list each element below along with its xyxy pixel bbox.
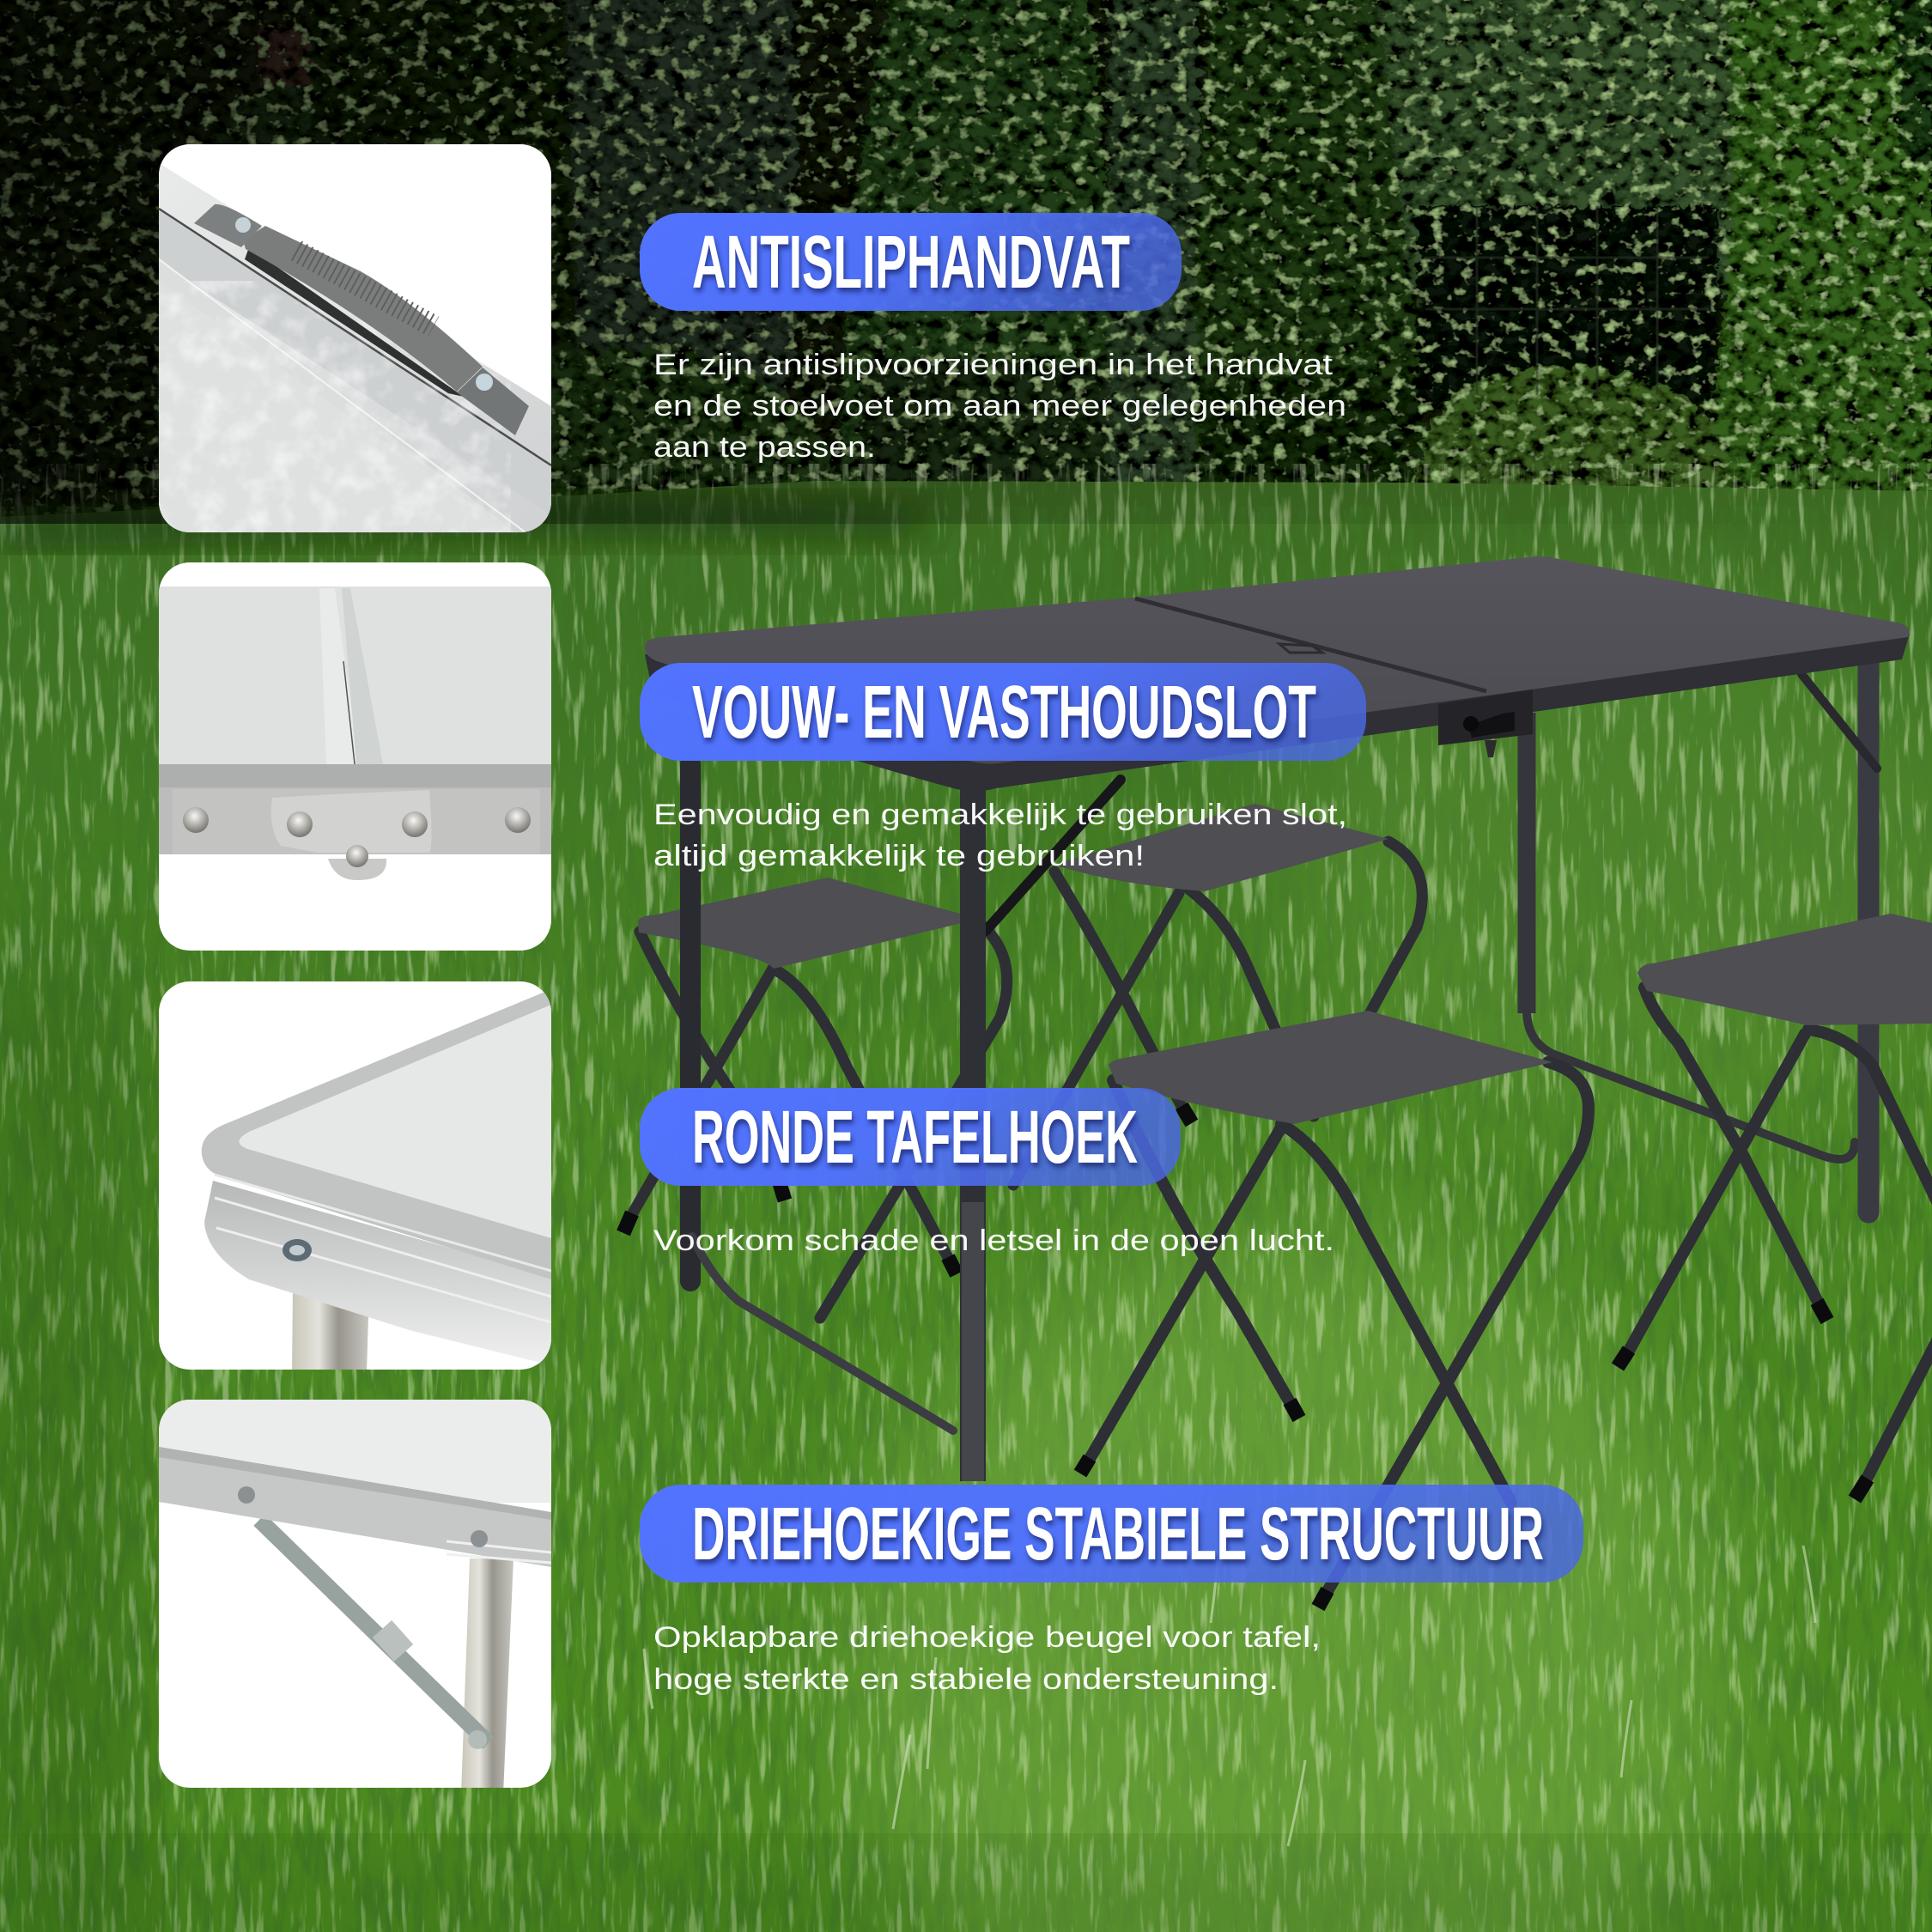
table: folding table with legs xyxy=(645,556,1910,1481)
folding lock xyxy=(1438,690,1533,757)
description: Voorkom schade en letsel in de open lucht. xyxy=(653,1224,1334,1257)
description: altijd gemakkelijk te gebruiken! xyxy=(653,840,1145,872)
heading pill xyxy=(640,663,1366,761)
trees and hedges xyxy=(0,0,1932,550)
heading pill: ANTISLIPHANDVAT xyxy=(692,221,1130,304)
table leg xyxy=(292,1293,368,1370)
centre brace xyxy=(986,780,1121,931)
front left leg xyxy=(960,777,986,1481)
lawn xyxy=(0,481,1932,1932)
callout: folding lock xyxy=(640,663,1366,872)
heading pill xyxy=(640,1485,1583,1583)
panel: anti-slip handle photo xyxy=(159,144,551,532)
description: Er zijn antislipvoorzieningen in het handvat xyxy=(653,349,1334,381)
description xyxy=(653,1621,1321,1696)
stool: front centre xyxy=(1080,1011,1589,1607)
callout: round table corner xyxy=(640,1088,1334,1257)
frame and panel xyxy=(202,989,551,1279)
side band xyxy=(204,1181,551,1365)
callout: antislip handle xyxy=(640,213,1346,464)
back left leg and foot bar xyxy=(690,764,953,1431)
stool: back centre xyxy=(1013,804,1422,1185)
panel: triangular bracket photo xyxy=(159,1400,551,1795)
right brace xyxy=(1801,674,1877,769)
description xyxy=(653,799,1347,872)
stool: front right xyxy=(1618,914,1932,1499)
dark photo overlay xyxy=(0,0,1932,524)
heading pill xyxy=(640,1088,1181,1186)
panel: round table corner photo xyxy=(159,981,551,1374)
table top xyxy=(645,556,1910,763)
description: hoge sterkte en stabiele ondersteuning. xyxy=(653,1663,1279,1696)
panel: folding lock photo xyxy=(159,562,551,951)
callout: triangular structure xyxy=(640,1485,1583,1696)
table side band xyxy=(645,634,1910,792)
right hinge leg and foot bar xyxy=(1527,713,1855,1159)
right leg xyxy=(1858,653,1879,1212)
description: Opklapbare driehoekige beugel voor tafel, xyxy=(653,1621,1321,1654)
heading pill: RONDE TAFELHOEK xyxy=(692,1096,1138,1179)
brace xyxy=(259,1520,489,1743)
lock plate and rivets xyxy=(183,790,531,880)
heading pill: VOUW- EN VASTHOUDSLOT xyxy=(692,671,1316,754)
description: en de stoelvoet om aan meer gelegenheden xyxy=(653,390,1346,422)
description: aan te passen. xyxy=(653,431,876,464)
description: Eenvoudig en gemakkelijk te gebruiken slot, xyxy=(653,799,1347,831)
leg xyxy=(461,1558,513,1795)
icon: handle xyxy=(194,204,529,435)
screw xyxy=(283,1239,312,1261)
heading pill xyxy=(640,213,1182,311)
description xyxy=(653,349,1346,464)
stool: back left xyxy=(623,878,1007,1318)
frame xyxy=(159,1447,551,1567)
